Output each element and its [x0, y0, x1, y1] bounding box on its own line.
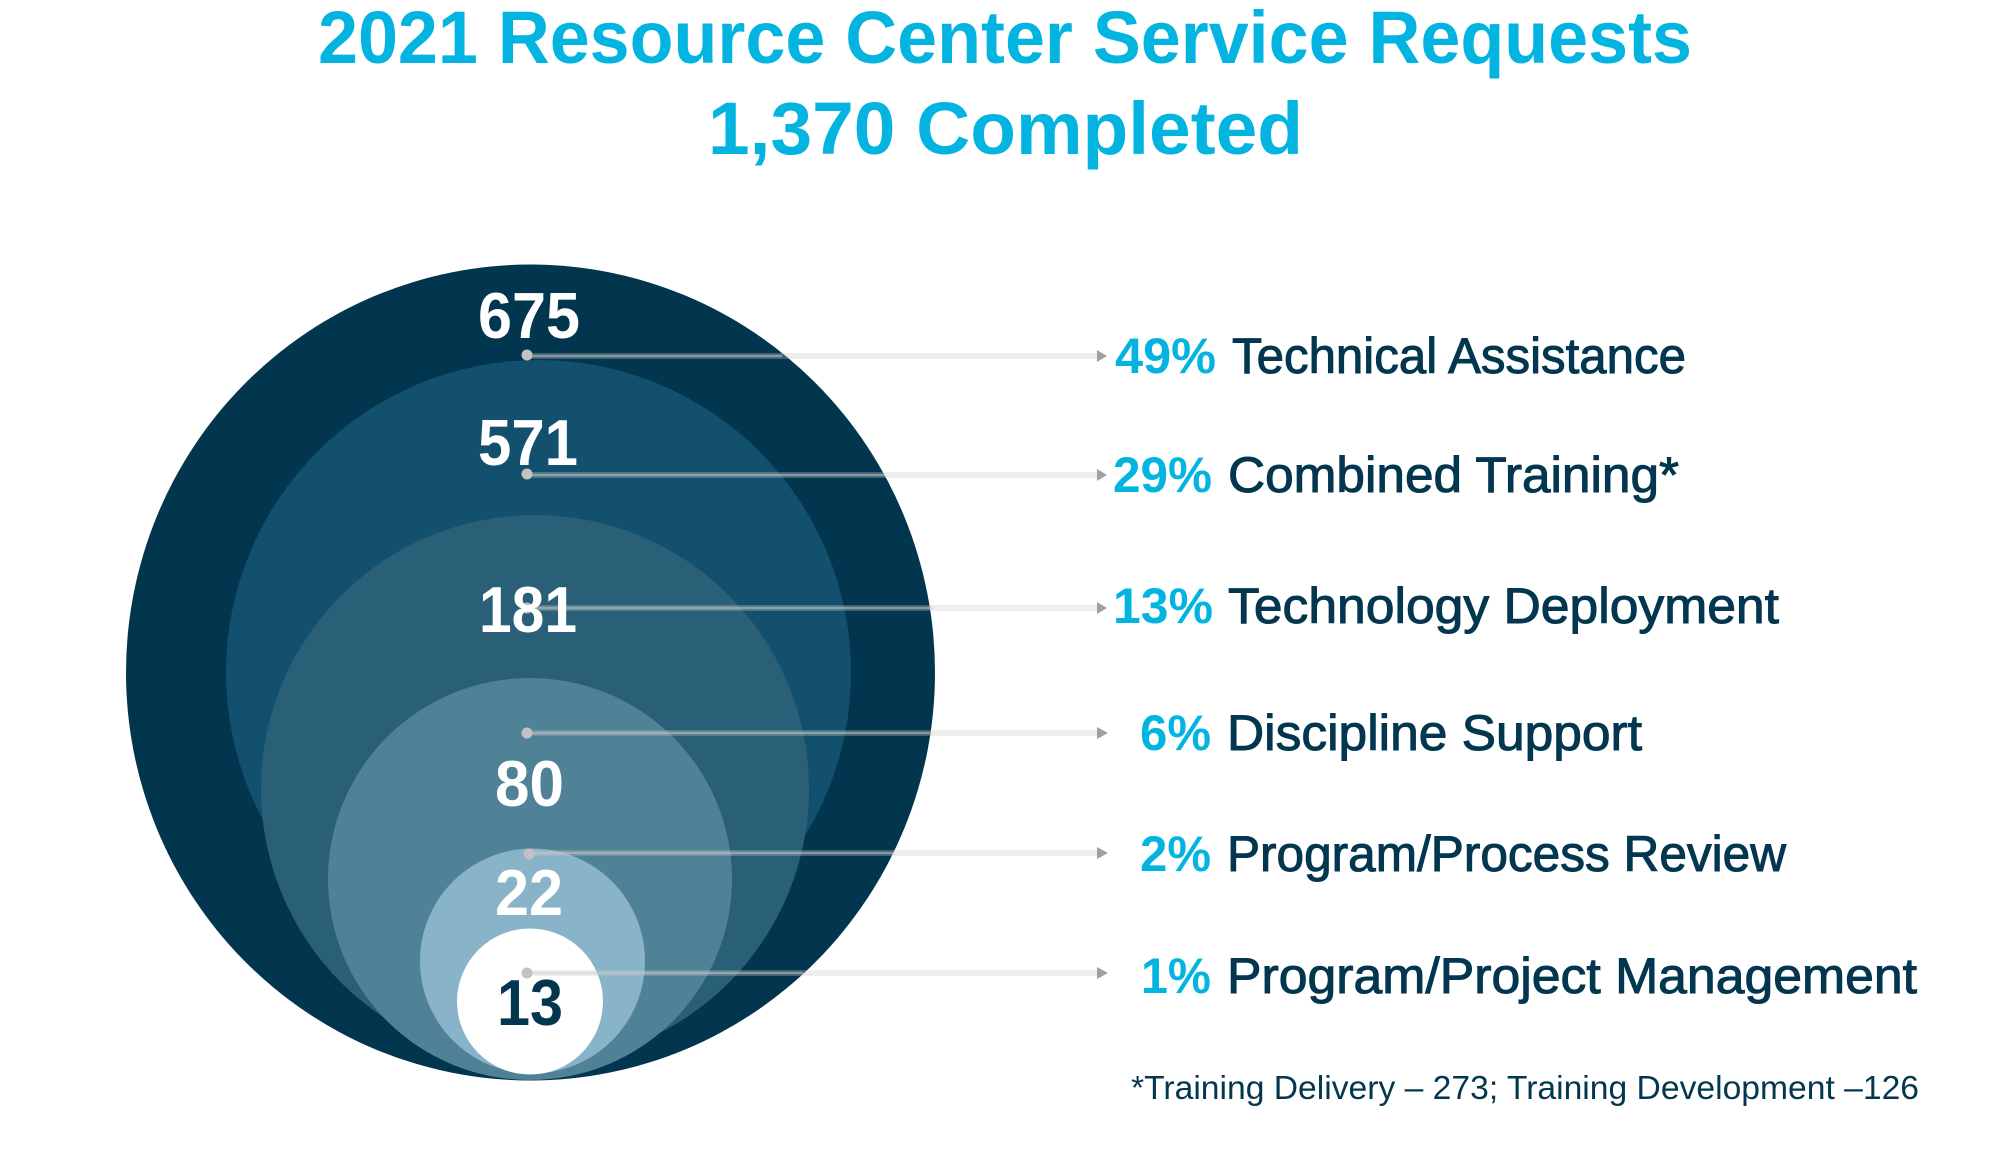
- label: Combined Training: 29%: [1113, 447, 1212, 503]
- label: Technology Deployment: 13%: [1113, 578, 1213, 634]
- circle values: 80: [495, 747, 564, 820]
- circle values: 22: [495, 856, 563, 929]
- connector: Discipline Support: [522, 727, 1108, 739]
- label: Technical Assistance: 49%: [1115, 328, 1216, 384]
- circle values: 181: [479, 573, 577, 646]
- nested circles chart: [126, 264, 935, 1080]
- connector: Program/Project Management: [522, 967, 1108, 979]
- label: Program/Process Review: Program/Process Review: [1227, 826, 1787, 882]
- connector: Program/Process Review: [524, 847, 1108, 860]
- label: Program/Project Management: 1%: [1141, 948, 1211, 1004]
- label: Discipline Support: 6%: [1140, 705, 1211, 761]
- label: Technical Assistance: Technical Assistance: [1232, 328, 1686, 384]
- label: Discipline Support: Discipline Support: [1227, 705, 1642, 761]
- circle values: 675: [478, 279, 580, 352]
- circle values: 571: [478, 406, 578, 479]
- label: Program/Process Review: 2%: [1140, 826, 1211, 882]
- circle values: 13: [497, 966, 563, 1039]
- label: Technology Deployment: Technology Deployment: [1228, 578, 1779, 634]
- label: Combined Training: Combined Training*: [1228, 447, 1679, 503]
- title: [318, 0, 1692, 170]
- circle values: [478, 279, 580, 1039]
- title: 1,370 Completed: [708, 87, 1303, 170]
- label: Program/Project Management: Program/Project Management: [1227, 948, 1917, 1004]
- footnote: *Training Delivery – 273; Training Development –126: [1131, 1069, 1919, 1106]
- connector: Technical Assistance: [522, 350, 1107, 362]
- connector: Technology Deployment: [522, 602, 1107, 614]
- connector: Combined Training: [522, 468, 1107, 481]
